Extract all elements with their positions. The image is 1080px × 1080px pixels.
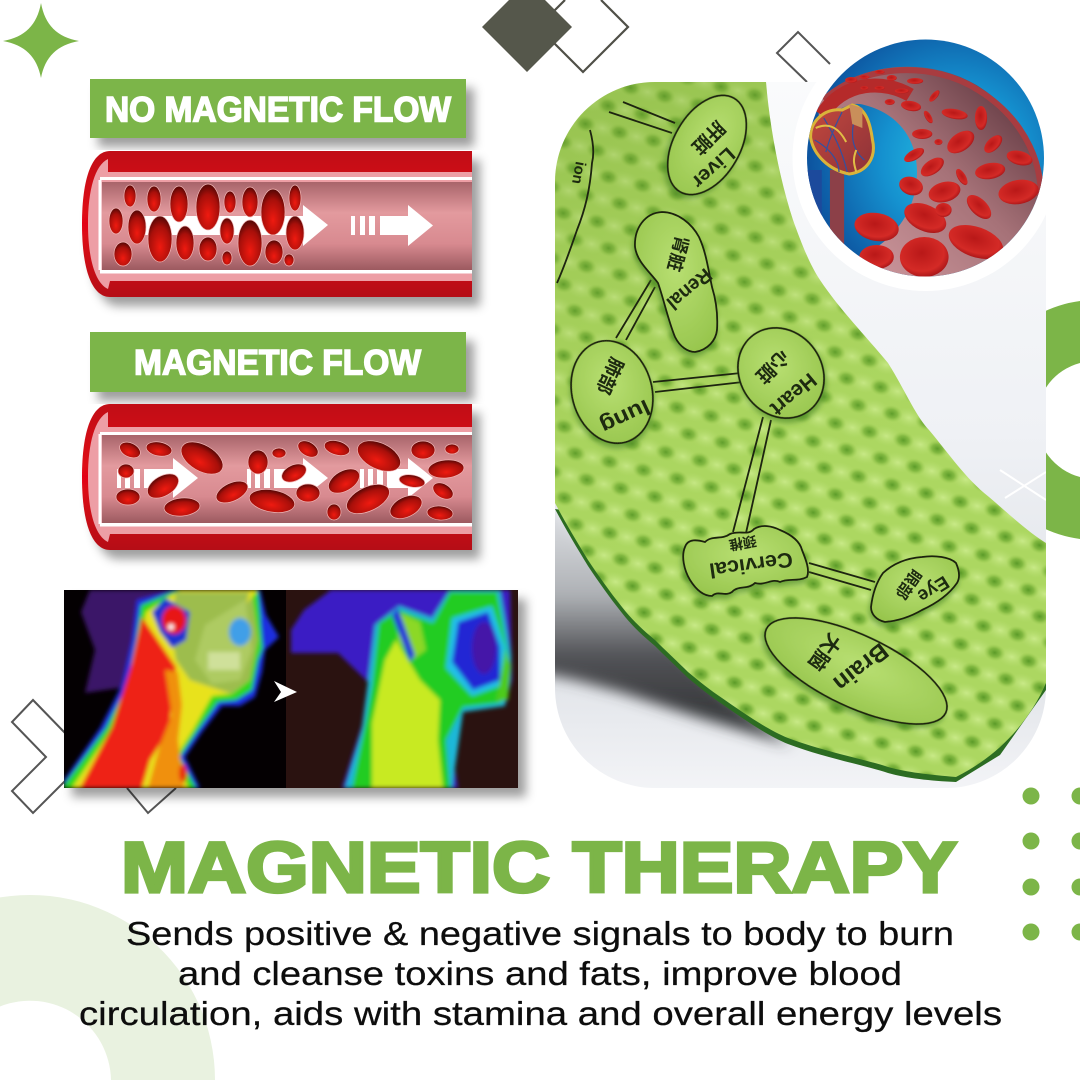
arrows: flow direction [117, 458, 433, 498]
pod: cervical [683, 526, 808, 596]
product panel [535, 82, 1046, 788]
label: no magnetic flow: NO MAGNETIC FLOW [105, 90, 451, 130]
pod: cervical: Cervical [708, 547, 794, 582]
decoration: dots at right edge [1022, 788, 1080, 940]
shadow under insole [555, 513, 792, 753]
blood cells: crowded [109, 184, 304, 266]
label: magnetic flow: MAGNETIC FLOW [134, 344, 421, 382]
blood cells: spaced [116, 434, 465, 523]
pod: lung: 肺部 [591, 354, 628, 398]
arrowhead between thermal images [274, 681, 297, 702]
pod: renal: 肾脏 [663, 234, 692, 274]
background decoration: pale green ring [0, 895, 215, 1080]
pod: renal: Renal [662, 263, 716, 314]
decoration: top diamonds [482, 0, 628, 72]
pod: brain: 大脑 [803, 629, 845, 675]
pod: liver: Liver [687, 143, 739, 193]
partial label at insole edge: ion [568, 160, 589, 185]
pod: renal [635, 212, 717, 352]
pod: lung [568, 340, 658, 452]
pod: heart: Heart [765, 368, 821, 420]
pod: brain [758, 616, 948, 732]
body text: Sends positive & negative signals to body to burn [126, 916, 954, 953]
insole [555, 82, 1046, 788]
vessel: free blood flow [82, 404, 472, 550]
heart [811, 104, 873, 174]
label: magnetic flow [90, 332, 466, 392]
pod: liver [662, 94, 748, 202]
body text: and cleanse toxins and fats, improve blood [178, 956, 902, 993]
pod: lung: lung [596, 394, 654, 439]
connectors [609, 102, 675, 133]
arrows: flow direction [130, 205, 433, 246]
vessel tube [819, 67, 1041, 290]
pod: eye [871, 556, 959, 622]
red cells [845, 70, 1041, 277]
body text [79, 916, 1002, 1033]
thermal: after [286, 590, 518, 788]
pod: eye: 眼部 [892, 566, 925, 603]
pod: heart: 心脏 [751, 345, 793, 387]
heading: MAGNETIC THERAPY [121, 829, 957, 908]
label: no magnetic flow [90, 79, 466, 138]
decoration: green ring at right edge [975, 301, 1080, 539]
pod: cervical: 颈椎 [728, 533, 758, 553]
pod: brain: Brain [828, 637, 893, 697]
body text: circulation, aids with stamina and overall energy levels [79, 996, 1002, 1033]
decoration: outlined diamond beside panel [777, 32, 830, 82]
decoration: green four-point star [3, 3, 79, 78]
aorta [830, 170, 844, 244]
decoration: outlined chevrons lower left [12, 700, 176, 813]
pod: liver: 肝脏 [687, 116, 729, 158]
thermal image comparison [64, 590, 518, 788]
inset: blood circulation [795, 40, 1046, 291]
pod: eye: Eye [913, 571, 952, 606]
thermal: before [64, 590, 286, 788]
pod: heart [735, 326, 830, 426]
vessel: slow blood flow [82, 151, 472, 297]
